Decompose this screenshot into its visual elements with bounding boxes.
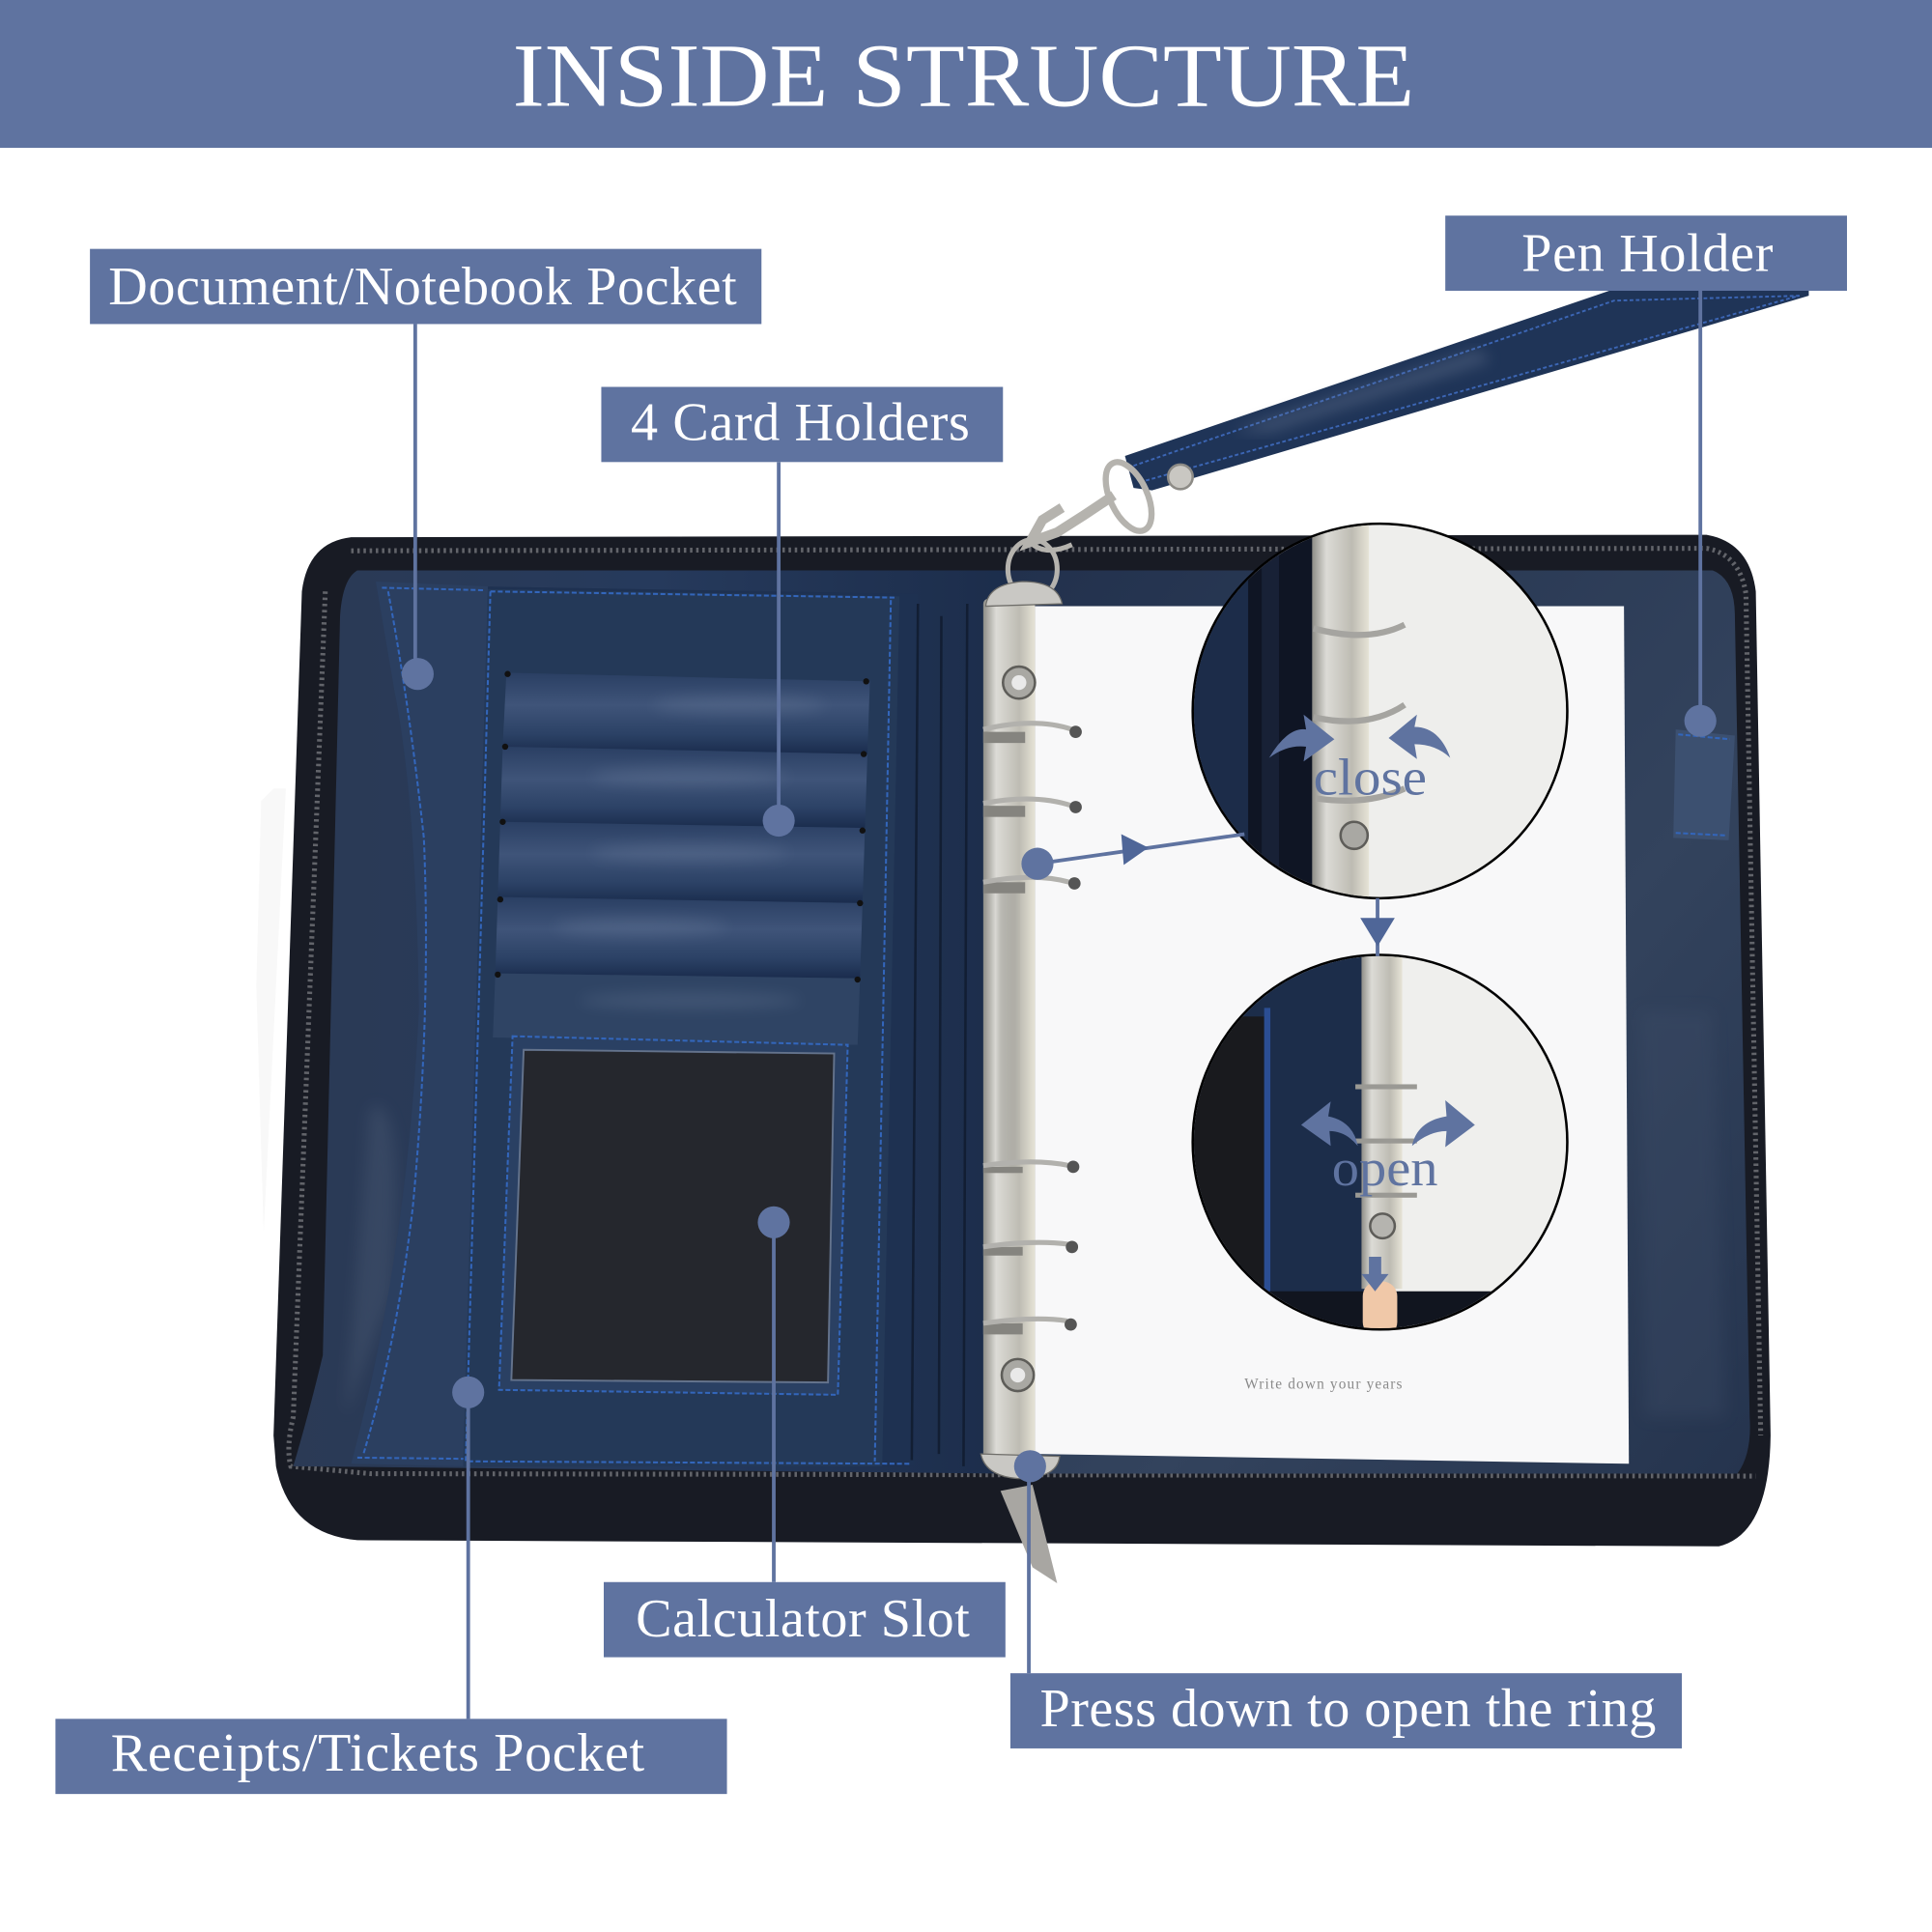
label: pen holder — [1445, 215, 1847, 737]
arrow: open left — [1301, 1101, 1358, 1146]
inset: ring closed — [1193, 524, 1567, 899]
label: 4 card holders: 4 Card Holders — [631, 392, 970, 452]
lining highlights — [345, 1010, 1725, 1417]
arrow: open right — [1412, 1100, 1475, 1148]
rings — [983, 724, 1072, 1323]
paper caption: Write down your years — [1244, 1376, 1403, 1392]
arrow: binder to closed inset — [1021, 835, 1244, 880]
inner spine folds — [912, 604, 967, 1466]
photo: open zip binder organizer — [256, 291, 1808, 1583]
label: receipts tickets pocket: Receipts/Tickets Pocket — [111, 1723, 644, 1783]
page tab — [1001, 1485, 1057, 1583]
card slots — [493, 671, 870, 1045]
arrow: closed inset to open inset — [1360, 898, 1395, 956]
card holder panel — [464, 586, 918, 1466]
header band — [0, 0, 1932, 148]
label: calculator slot: Calculator Slot — [636, 1589, 970, 1649]
pen holder loop — [1673, 729, 1735, 840]
arrow: close right — [1389, 715, 1450, 759]
inset: ring open — [1193, 955, 1567, 1341]
arrow: press down — [1361, 1257, 1389, 1292]
label: document notebook pocket — [90, 249, 761, 690]
zipper teeth — [289, 549, 1761, 1476]
label: calculator slot — [604, 1207, 1006, 1658]
interior lining right — [1010, 571, 1750, 1474]
label: press down to open the ring: Press down to open the ring — [1040, 1679, 1656, 1739]
title: INSIDE STRUCTURE — [513, 27, 1414, 127]
label: receipts tickets pocket — [55, 1377, 727, 1794]
metal clasp — [1008, 455, 1161, 599]
label: open: open — [1332, 1139, 1438, 1197]
arrow: close left — [1269, 715, 1334, 761]
calculator slot window — [499, 1037, 848, 1395]
ring hardware blocks — [983, 732, 1025, 1334]
paper refill — [1035, 607, 1629, 1463]
label: press down to open the ring — [1010, 1450, 1682, 1748]
label: close: close — [1314, 749, 1427, 807]
wrist strap — [1125, 291, 1808, 491]
interior lining left — [294, 571, 1010, 1474]
left pocket panel: document pocket — [352, 582, 491, 1466]
six ring binder mechanism — [980, 582, 1082, 1479]
label: pen holder: Pen Holder — [1521, 224, 1774, 284]
label: 4 card holders — [601, 387, 1003, 837]
label: document notebook pocket: Document/Notebook Pocket — [108, 257, 737, 317]
outer zipper case — [273, 535, 1771, 1547]
